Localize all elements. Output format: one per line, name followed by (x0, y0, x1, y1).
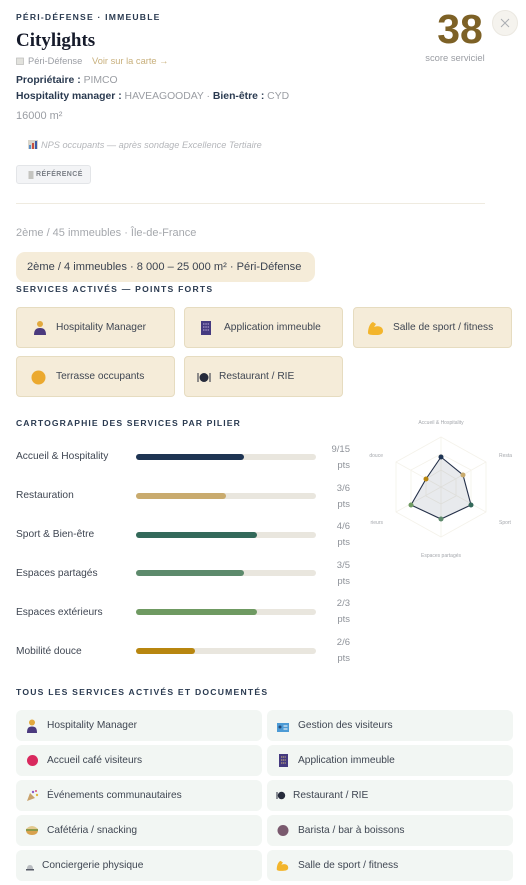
label: Gestion des visiteurs (298, 720, 393, 730)
row: espaces partagés: pts (337, 576, 350, 587)
chart: radar: Espaces partagés (421, 553, 462, 559)
ranking: region: 2ème / 45 immeubles · Île-de-France (16, 227, 196, 239)
badge: référencé (16, 165, 91, 184)
row: espaces extérieurs: pts (337, 614, 350, 625)
item: événements (16, 780, 262, 811)
row: restauration: Restauration (16, 490, 74, 501)
eyebrow: PÉRI-DÉFENSE · IMMEUBLE (16, 12, 161, 22)
header: building identity (16, 12, 289, 184)
managers: Hospitality manager : HAVEAGOODAY · Bien-être : CYD (16, 91, 289, 102)
card: terrasse (16, 356, 175, 397)
icon: plate (198, 373, 210, 382)
row: accueil: Accueil & Hospitality (16, 451, 108, 462)
surface: 16000 m² (16, 110, 62, 122)
ranking pill (16, 252, 315, 282)
heading: points forts: SERVICES ACTIVÉS — POINTS FORTS (16, 284, 213, 294)
chart: radar: rieurs (370, 520, 383, 526)
NPS note (28, 140, 262, 150)
label: Hospitality Manager (56, 322, 146, 333)
location name: Péri-Défense (28, 56, 82, 66)
owner: Propriétaire : PIMCO (16, 75, 118, 86)
icon: person (27, 720, 37, 733)
score (425, 6, 485, 63)
row: mobilité: Mobilité douce (16, 646, 82, 657)
row: mobilité: 2/6 (337, 637, 350, 648)
card: restaurant (184, 356, 343, 397)
icon: sandwich (26, 826, 38, 835)
chart: pillar bars (16, 444, 350, 664)
label: Salle de sport / fitness (298, 860, 398, 870)
row: espaces partagés (16, 560, 350, 587)
icon: map (16, 58, 24, 65)
chart: radar (369, 420, 512, 559)
label: Terrasse occupants (56, 371, 144, 382)
row: espaces extérieurs: 2/3 (337, 598, 350, 609)
map link: Voir sur la carte → (92, 56, 168, 66)
row: mobilité: pts (337, 653, 350, 664)
icon: chart (28, 140, 38, 149)
label: Conciergerie physique (42, 860, 143, 870)
chart: radar: Resta (499, 453, 512, 459)
label: Cafétéria / snacking (47, 824, 137, 836)
row: espaces extérieurs (16, 598, 350, 625)
row: sport: Sport & Bien-être (16, 529, 94, 540)
label: Application immeuble (224, 322, 321, 333)
icon: flexed arm (276, 860, 288, 871)
label: Événements communautaires (47, 790, 182, 800)
note text: NPS occupants — après sondage Excellence Tertiaire (41, 140, 262, 150)
close button (492, 10, 518, 36)
label: Barista / bar à boissons (298, 824, 404, 836)
icon: building (279, 754, 288, 767)
badge text: RÉFÉRENCÉ (36, 171, 83, 178)
item: gestion visiteurs (267, 710, 513, 741)
icon: plate (276, 792, 286, 800)
item: hospitality manager (16, 710, 262, 741)
row: mobilité (16, 637, 350, 664)
score value: 38 (437, 6, 483, 52)
label: Accueil café visiteurs (47, 754, 142, 766)
label: Restaurant / RIE (219, 371, 294, 382)
row: sport: 4/6 (337, 521, 350, 532)
icon: bell (26, 865, 34, 870)
item: sport (267, 850, 513, 881)
row: accueil (16, 444, 350, 471)
ranking pill: 2ème / 4 immeubles · 8 000 – 25 000 m² · Péri-Défense (27, 261, 301, 273)
chart: radar: douce (369, 453, 383, 459)
icon: flexed arm (368, 322, 383, 335)
heading: cartographie: CARTOGRAPHIE DES SERVICES PAR PILIER (16, 418, 241, 428)
row: restauration: pts (337, 499, 350, 510)
card: sport (353, 307, 512, 348)
location line (16, 56, 168, 66)
item: restaurant (267, 780, 513, 811)
chart: radar: Accueil & Hospitality (418, 420, 464, 426)
row: sport (16, 521, 350, 548)
row: restauration (16, 483, 350, 510)
score label: score serviciel (425, 52, 485, 63)
row: sport: pts (337, 537, 350, 548)
icon: party popper (27, 790, 38, 801)
label: Hospitality Manager (47, 720, 137, 730)
card: hospitality manager (16, 307, 175, 348)
item: accueil café (16, 745, 262, 776)
item: cafétéria (16, 815, 262, 846)
icon: cup (278, 825, 288, 836)
row: restauration: 3/6 (337, 483, 350, 494)
building name: Citylights (16, 30, 95, 51)
item: conciergerie (16, 850, 262, 881)
panel: highlighted services (16, 307, 512, 397)
item: application (267, 745, 513, 776)
heading: tous les services: TOUS LES SERVICES ACTIVÉS ET DOCUMENTÉS (16, 687, 268, 697)
row: espaces extérieurs: Espaces extérieurs (16, 607, 103, 618)
icon: building (201, 321, 211, 335)
icon: person (34, 321, 46, 335)
icon: badge (28, 171, 34, 179)
row: accueil: pts (337, 460, 350, 471)
row: espaces partagés: 3/5 (337, 560, 350, 571)
item: barista (267, 815, 513, 846)
chart: radar: Sport (499, 520, 512, 526)
icon: sun (32, 370, 46, 384)
card: application (184, 307, 343, 348)
icon: teapot (27, 755, 38, 766)
row: espaces partagés: Espaces partagés (16, 568, 98, 579)
label: Restaurant / RIE (293, 790, 368, 800)
panel: all services (16, 710, 513, 881)
icon: id card (277, 723, 289, 732)
label: Salle de sport / fitness (393, 322, 493, 333)
row: accueil: 9/15 (332, 444, 350, 455)
label: Application immeuble (298, 754, 395, 766)
